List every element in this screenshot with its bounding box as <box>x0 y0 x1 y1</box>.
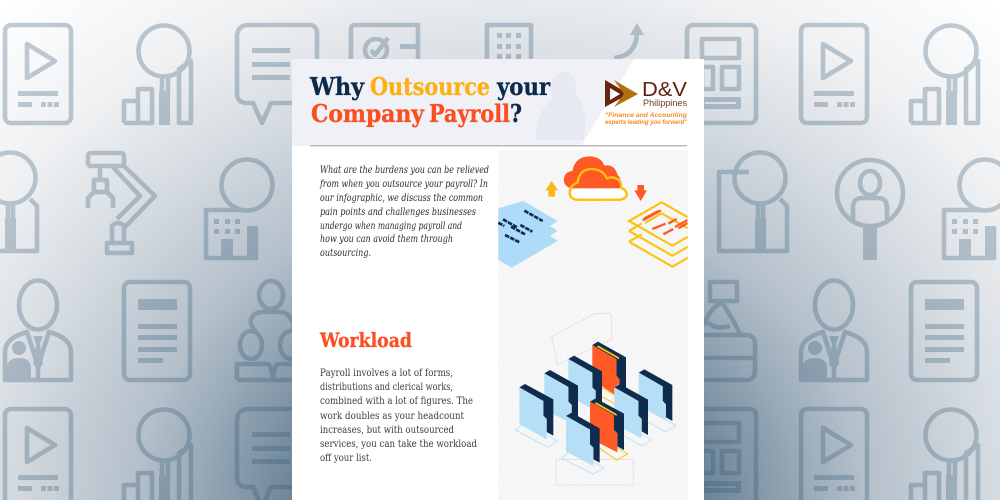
folder: blue <box>614 384 648 438</box>
logo: D&V Philippines: Philippines <box>643 98 688 108</box>
intro text: outsourcing. <box>320 248 371 259</box>
icon: magnifier over building <box>206 160 272 260</box>
folder: orange, back <box>592 342 626 394</box>
illustration background <box>498 150 688 500</box>
folder: blue <box>568 356 602 411</box>
body text: increases, but with outsourced <box>320 425 455 436</box>
body text: work doubles as your headcount <box>320 411 464 422</box>
icon: magnifier over document <box>719 152 787 251</box>
dotted outlines <box>552 313 633 485</box>
icon: layout sheet <box>687 409 756 500</box>
panel: infographic page <box>292 59 705 500</box>
icon: video document <box>801 25 867 123</box>
floor outlines <box>516 388 676 474</box>
logo: D&V Philippines: experts leading you forward" <box>605 120 687 126</box>
icon: magnifier over bar chart <box>911 410 978 500</box>
title: Why <box>309 72 365 101</box>
body text: distributions and clerical works, <box>320 382 453 393</box>
icon: video document <box>5 25 71 123</box>
icon: growth arrow <box>614 23 644 58</box>
intro text: how you can avoid them through <box>320 234 453 245</box>
intro text: What are the burdens you can be relieved <box>320 165 489 176</box>
body text: combined with a lot of figures. The <box>320 396 473 407</box>
icon: magnifier over building <box>944 160 1000 260</box>
intro text: pain points and challenges businesses <box>320 207 476 218</box>
intro text: from when you outsource your payroll? In <box>319 179 488 190</box>
icon: magnifier over person <box>837 160 903 260</box>
folder: blue <box>519 384 553 439</box>
icon: magnifier over bar chart <box>124 26 191 125</box>
title: ? <box>510 99 522 128</box>
icon: magnifier over document <box>0 152 37 251</box>
title: your <box>496 72 550 101</box>
folder: blue, front <box>566 413 600 466</box>
folder: blue, right <box>639 369 672 421</box>
icon: layout sheet <box>687 25 756 123</box>
logo: D&V Philippines <box>605 79 688 126</box>
title: Outsource <box>370 72 490 101</box>
heading: Workload: Workload <box>319 328 412 352</box>
icon: person with portrait <box>5 280 71 380</box>
icon pattern: second row <box>0 152 1000 260</box>
icon: cloud <box>564 156 627 200</box>
icon: blue document stack <box>498 201 558 268</box>
illustration: cloud transfer <box>498 156 705 268</box>
icon: robot arm <box>88 153 155 253</box>
icon: group of people <box>237 281 302 380</box>
icon pattern: top row <box>5 23 978 125</box>
icon: speech bubble <box>237 409 317 500</box>
body text <box>320 368 478 464</box>
title: Company <box>311 99 425 128</box>
icon: checklist <box>351 25 418 62</box>
icon: down arrow <box>634 185 647 201</box>
body text: Payroll involves a lot of forms, <box>320 368 453 379</box>
icon pattern: third row <box>5 280 977 380</box>
illustration: folders <box>516 313 676 485</box>
header tint <box>292 59 634 146</box>
logo: D&V Philippines: "Finance and Accounting <box>605 113 687 119</box>
icon: yellow layered sheets <box>626 201 688 268</box>
header rule <box>310 145 687 146</box>
logo: D&V Philippines: D&V <box>642 79 688 101</box>
icon: video document <box>801 409 867 500</box>
intro text: our infographic, we discuss the common <box>320 193 483 204</box>
icon: person with portrait <box>801 280 867 380</box>
body text: services, you can take the workload <box>320 439 478 450</box>
folder: orange, front <box>590 398 624 452</box>
intro text: undergo when managing payroll and <box>320 221 462 232</box>
icon: magnifier over bar chart <box>911 26 978 125</box>
icon: text document <box>124 282 190 380</box>
title: Payroll <box>429 99 510 128</box>
icon: text document <box>911 282 977 380</box>
intro text <box>319 165 489 259</box>
title <box>309 72 550 128</box>
folder: blue <box>544 370 578 423</box>
icon: up arrow <box>545 181 558 197</box>
icon: magnifier over bar chart <box>124 410 191 500</box>
body text: off your list. <box>320 453 372 464</box>
icon: video document <box>5 409 71 500</box>
icon: speech bubble <box>237 25 317 123</box>
icon: office tower <box>487 25 531 62</box>
icon: desk worker <box>690 282 755 380</box>
icon pattern: bottom row <box>5 409 978 500</box>
